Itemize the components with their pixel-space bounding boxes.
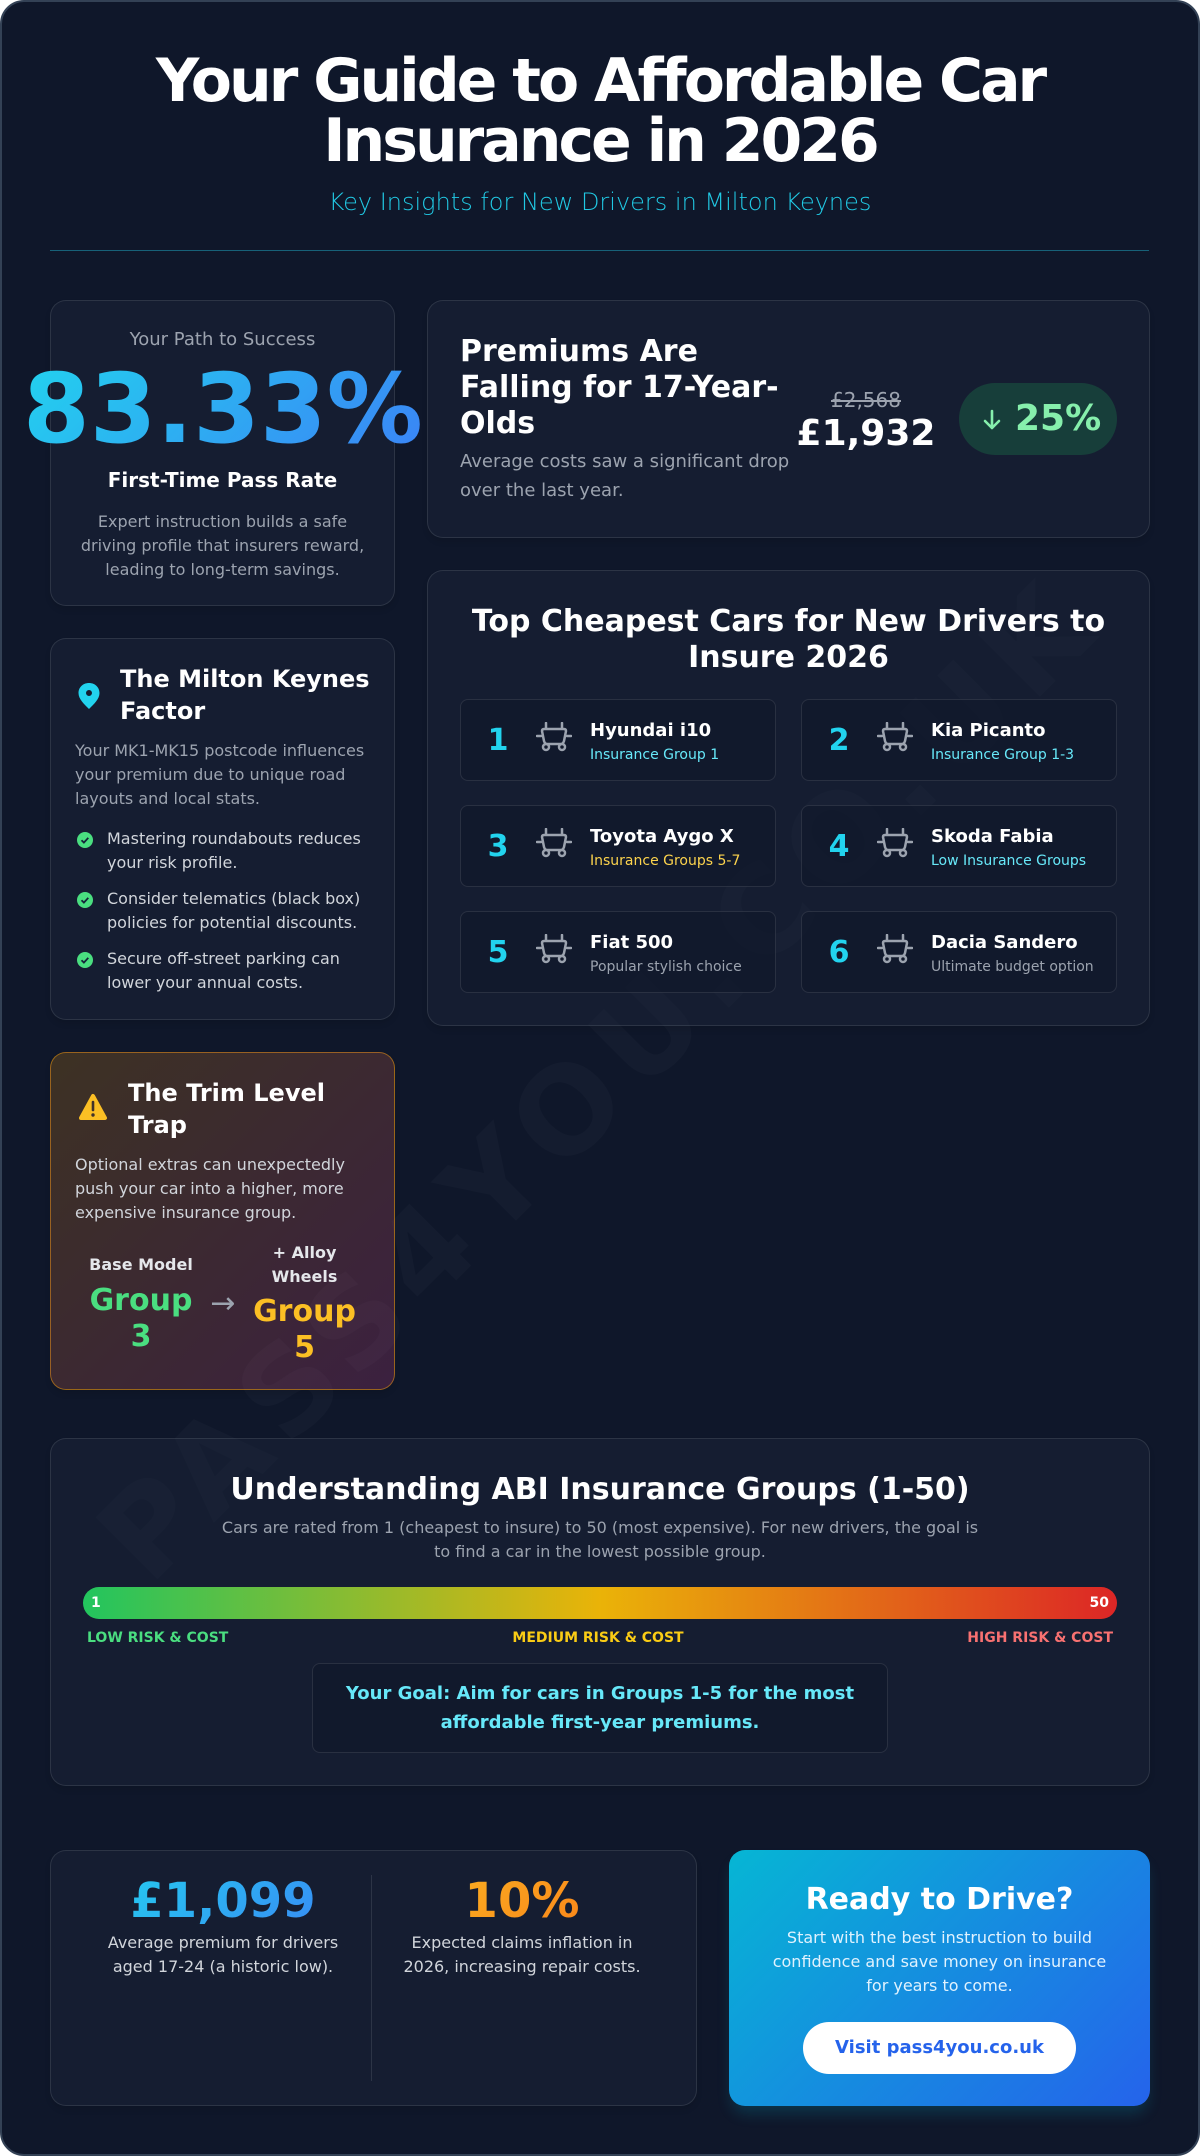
car card 4: Skoda Fabia: [931, 826, 1054, 847]
car card 3: Insurance Groups 5-7: [590, 853, 740, 869]
drop percent pill: [959, 383, 1117, 455]
car card 6: Dacia Sandero: [931, 932, 1078, 953]
stat: average premium: £1,099: [130, 1873, 316, 1929]
goal callout: [312, 1663, 888, 1753]
check item 2: Consider telematics (black box): [107, 889, 360, 908]
premiums heading: Falling for 17-Year-: [460, 370, 779, 405]
trim heading: [128, 1079, 325, 1139]
risk gradient bar: 1: [91, 1595, 101, 1611]
header divider line: [50, 250, 1149, 251]
icon: car: [877, 828, 913, 858]
trim description: push your car into a higher, more: [75, 1179, 344, 1198]
base model column: Group: [90, 1283, 192, 1318]
icon: down arrow: [984, 410, 1000, 430]
panel: cheapest cars: [427, 570, 1150, 1026]
base model column: Base Model: [89, 1255, 193, 1274]
car card 4: 4: [829, 829, 849, 864]
car card 6: Ultimate budget option: [931, 959, 1094, 975]
trim description: [75, 1155, 345, 1222]
ABI description: [222, 1518, 978, 1561]
panel: premiums falling: [427, 300, 1150, 538]
check item 1: Mastering roundabouts reduces: [107, 829, 361, 848]
car card 3: Toyota Aygo X: [590, 826, 734, 847]
car card 4: [801, 805, 1117, 887]
CTA button: [803, 2022, 1076, 2074]
panel: Milton Keynes factor: [50, 638, 395, 1020]
car card 2: [801, 699, 1117, 781]
goal callout: affordable first-year premiums.: [441, 1712, 759, 1733]
factor description: [75, 741, 364, 808]
factor description: layouts and local stats.: [75, 789, 260, 808]
stat: claims inflation: 2026, increasing repair costs.: [403, 1957, 641, 1976]
pass rate description: Expert instruction builds a safe: [98, 512, 347, 531]
checklist: [77, 829, 361, 992]
icon: car: [536, 934, 572, 964]
risk gradient bar: [83, 1587, 1117, 1619]
check item 2: policies for potential discounts.: [107, 913, 357, 932]
title: [155, 46, 1047, 176]
icon: check: [77, 952, 93, 968]
factor heading: The Milton Keynes: [120, 665, 370, 693]
goal callout: Your Goal: Aim for cars in Groups 1-5 for the most: [346, 1683, 854, 1704]
car card 2: Insurance Group 1-3: [931, 747, 1074, 763]
premiums description: over the last year.: [460, 480, 624, 501]
car card 3: [460, 805, 776, 887]
check item 3: lower your annual costs.: [107, 973, 303, 992]
pass rate number: 83.33%: [23, 353, 423, 465]
car card 5: Fiat 500: [590, 932, 673, 953]
new price: £1,932: [797, 413, 935, 454]
pass rate description: leading to long-term savings.: [105, 560, 340, 579]
car card 3: 3: [488, 829, 508, 864]
factor description: your premium due to unique road: [75, 765, 345, 784]
icon: location pin: [78, 683, 100, 709]
ABI description: to find a car in the lowest possible group.: [434, 1542, 766, 1561]
check item 3: Secure off-street parking can: [107, 949, 340, 968]
CTA heading: Ready to Drive?: [806, 1882, 1073, 1917]
arrow: →: [210, 1286, 236, 1321]
upgraded column: + Alloy: [273, 1243, 336, 1262]
car card 1: Insurance Group 1: [590, 747, 719, 763]
icon: check: [77, 832, 93, 848]
car card 1: Hyundai i10: [590, 720, 711, 741]
icon: car: [536, 828, 572, 858]
check item 2: [77, 889, 360, 932]
CTA text: [773, 1928, 1106, 1995]
subtitle: Key Insights for New Drivers in Milton Keynes: [329, 188, 871, 216]
upgraded column: Wheels: [272, 1267, 337, 1286]
car card 4: Low Insurance Groups: [931, 853, 1086, 869]
pass rate description: driving profile that insurers reward,: [81, 536, 364, 555]
medium risk label: MEDIUM RISK & COST: [512, 1630, 684, 1646]
stat: claims inflation: 10%: [465, 1873, 579, 1929]
car card 1: [460, 699, 776, 781]
stat: claims inflation: [403, 1873, 641, 1976]
upgraded column: [253, 1243, 356, 1365]
car card 5: Popular stylish choice: [590, 959, 742, 975]
pass rate label: First-Time Pass Rate: [108, 468, 337, 492]
stat divider: [371, 1875, 372, 2081]
stat: average premium: Average premium for drivers: [108, 1933, 338, 1952]
CTA text: for years to come.: [866, 1976, 1013, 1995]
upgraded column: 5: [294, 1330, 315, 1365]
check item 1: your risk profile.: [107, 853, 237, 872]
icon: check: [77, 892, 93, 908]
car card 2: Kia Picanto: [931, 720, 1046, 741]
car card 5: 5: [488, 935, 508, 970]
cars heading: Insure 2026: [688, 640, 889, 675]
icon: car: [877, 722, 913, 752]
car card 1: 1: [488, 723, 508, 758]
check item 3: [77, 949, 340, 992]
CTA text: Start with the best instruction to build: [787, 1928, 1092, 1947]
CTA text: confidence and save money on insurance: [773, 1952, 1106, 1971]
high risk label: HIGH RISK & COST: [967, 1630, 1113, 1646]
premiums description: Average costs saw a significant drop: [460, 451, 789, 472]
CTA button: Visit pass4you.co.uk: [835, 2037, 1044, 2058]
panel: call to action: [729, 1850, 1150, 2106]
title: Your Guide to Affordable Car: [156, 46, 1044, 116]
trim heading: The Trim Level: [128, 1079, 325, 1107]
title: Insurance in 2026: [323, 106, 877, 176]
premiums description: [460, 451, 789, 501]
check item 1: [77, 829, 361, 872]
icon: warning triangle: [79, 1094, 108, 1120]
upgraded column: Group: [253, 1294, 356, 1329]
panel: pass rate: [50, 300, 395, 606]
pass rate eyebrow: Your Path to Success: [130, 329, 315, 350]
car card 2: 2: [829, 723, 849, 758]
ABI heading: Understanding ABI Insurance Groups (1-50): [230, 1472, 970, 1507]
pass rate description: [81, 512, 364, 579]
panel: ABI groups: [50, 1438, 1150, 1786]
ABI description: Cars are rated from 1 (cheapest to insure) to 50 (most expensive). For new drivers, the goal is: [222, 1518, 978, 1537]
panel: key stats: [50, 1850, 697, 2106]
stat: claims inflation: Expected claims inflation in: [411, 1933, 633, 1952]
factor heading: [120, 665, 370, 725]
premiums heading: [460, 334, 779, 441]
trim description: Optional extras can unexpectedly: [75, 1155, 345, 1174]
trim description: expensive insurance group.: [75, 1203, 296, 1222]
trim heading: Trap: [128, 1111, 187, 1139]
old price: £2,568: [831, 388, 901, 412]
cars heading: Top Cheapest Cars for New Drivers to: [472, 604, 1105, 639]
stat: average premium: [108, 1873, 338, 1976]
watermark: PASS4YOU.CO.UK: [72, 552, 1127, 1607]
premiums heading: Premiums Are: [460, 334, 698, 369]
drop percent: 25%: [1015, 398, 1101, 439]
icon: car: [536, 722, 572, 752]
base model column: 3: [131, 1319, 151, 1354]
car card 5: [460, 911, 776, 993]
cars heading: [472, 604, 1105, 675]
base model column: [89, 1255, 193, 1354]
risk gradient bar: 50: [1090, 1595, 1109, 1611]
icon: car: [877, 934, 913, 964]
car card 6: [801, 911, 1117, 993]
factor description: Your MK1-MK15 postcode influences: [75, 741, 364, 760]
factor heading: Factor: [120, 697, 205, 725]
stat: average premium: aged 17-24 (a historic low).: [113, 1957, 333, 1976]
premiums heading: Olds: [460, 406, 535, 441]
car card 6: 6: [829, 935, 849, 970]
panel: trim level trap: [50, 1052, 395, 1390]
low risk label: LOW RISK & COST: [87, 1630, 228, 1646]
